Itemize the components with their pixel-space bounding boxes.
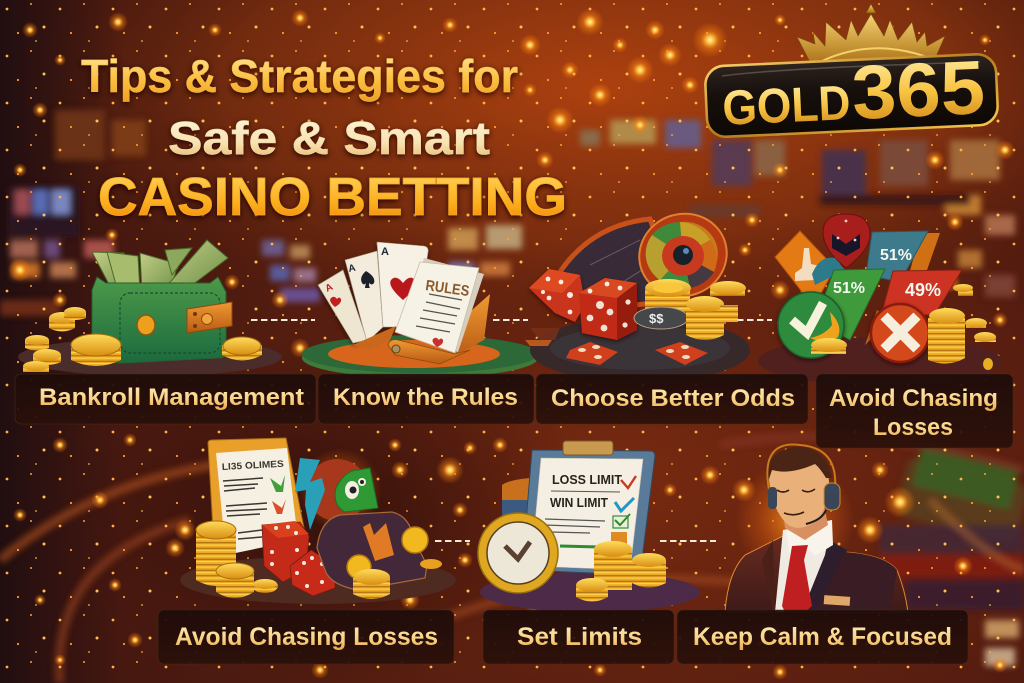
icon: odds comparison badges [758, 214, 1002, 385]
icon: clipboard with limits and stopwatch: WIN LIMIT [550, 496, 608, 510]
coin stacks [71, 344, 121, 366]
orange tile [905, 233, 940, 290]
label: Set Limits [483, 610, 674, 664]
label: Keep Calm & Focused [677, 610, 968, 664]
logo wordmark [720, 45, 987, 142]
red dice pin [823, 214, 870, 268]
logo wordmark: GOLD [721, 76, 852, 136]
flat dice [566, 342, 618, 365]
label: Set Limits: Set Limits [517, 623, 642, 651]
scene platform [180, 556, 456, 604]
icon: calm dealer with headset [725, 445, 908, 612]
icon: clipboard with limits and stopwatch [478, 441, 700, 612]
neck and face [782, 505, 828, 540]
label: Avoid Chasing Losses (bottom): Avoid Chasing Losses [175, 623, 438, 651]
coin stacks [811, 348, 846, 354]
logo wordmark: 365 [850, 45, 987, 136]
dice right [579, 278, 637, 340]
wallet body [92, 277, 226, 363]
label: Avoid Chasing Losses (top): Avoid Chasing [829, 385, 998, 412]
checklist folder [208, 438, 304, 530]
icon: wallet with cash and coins [18, 240, 282, 376]
coin stack tall [196, 530, 236, 586]
hair [766, 447, 832, 485]
cards [318, 242, 428, 343]
rules sheet [396, 258, 484, 352]
icon: playing cards and rules sheet: A [324, 282, 335, 295]
roulette wheel [628, 202, 738, 308]
label: Know the Rules: Know the Rules [333, 384, 518, 411]
connector arrows [251, 320, 772, 541]
label: Bankroll Management: Bankroll Management [39, 384, 304, 411]
holder back [450, 294, 490, 358]
label: Avoid Chasing Losses (bottom) [158, 610, 454, 664]
icon: roulette wheel, dice and coins [525, 202, 750, 382]
icon: playing cards and rules sheet: RULES [424, 277, 470, 300]
icon: crown [797, 4, 945, 66]
green 51 percent tile [815, 269, 885, 340]
label: Avoid Chasing Losses (top) [816, 374, 1013, 448]
icon: checklist, dice and pouch [180, 438, 456, 604]
colorful shapes [306, 459, 368, 521]
cash [92, 240, 228, 292]
card table [302, 338, 538, 378]
icon: playing cards and rules sheet [302, 242, 538, 378]
coin stacks [594, 550, 632, 590]
shirt [775, 520, 832, 612]
name badge [824, 595, 850, 606]
red 49 percent tile [880, 270, 962, 320]
title line 3: CASINO BETTING [98, 167, 567, 227]
wallet button [137, 315, 155, 335]
label: Choose Better Odds [536, 374, 808, 424]
title line 2: Safe & Smart [168, 112, 490, 164]
icon: odds comparison badges: 51% [833, 280, 865, 297]
label: Choose Better Odds: Choose Better Odds [551, 385, 795, 412]
blue 51 percent tile [866, 231, 928, 282]
tie [782, 545, 812, 612]
icon: odds comparison badges: 51% [880, 247, 912, 264]
headset [767, 445, 835, 490]
icon: clipboard with limits and stopwatch: LOSS LIMIT [552, 473, 622, 487]
label: Keep Calm & Focused: Keep Calm & Focused [693, 623, 952, 651]
holder front [388, 340, 470, 364]
logo: GOLD365 [705, 4, 998, 142]
check circle [778, 292, 844, 358]
dice left [529, 269, 637, 340]
clipboard [522, 450, 655, 575]
icon: checklist, dice and pouch: LI35 OLIMES [222, 459, 284, 473]
dice [262, 522, 309, 582]
leather pouch [317, 512, 427, 590]
gold coins [402, 527, 428, 553]
wallet clasp [187, 302, 232, 333]
roulette bowl [558, 219, 680, 310]
binder [502, 478, 530, 515]
icon: playing cards and rules sheet: A [381, 246, 389, 258]
coin stacks and chip [645, 290, 690, 312]
title line 1: Tips & Strategies for [81, 50, 518, 102]
icon: odds comparison badges: 49% [905, 280, 941, 300]
label: Bankroll Management [15, 374, 316, 424]
label: Avoid Chasing Losses (top): Losses [873, 414, 953, 441]
thumbs-up tile [775, 231, 835, 297]
label: Know the Rules [318, 374, 534, 424]
title [81, 50, 567, 227]
cross circle [871, 304, 929, 362]
logo plate [705, 53, 998, 138]
eyes and smile [777, 489, 815, 515]
suit [725, 530, 908, 612]
stopwatch [478, 513, 558, 593]
icon: roulette wheel, dice and coins: $$ [649, 311, 664, 326]
icon: playing cards and rules sheet: A [347, 263, 357, 275]
